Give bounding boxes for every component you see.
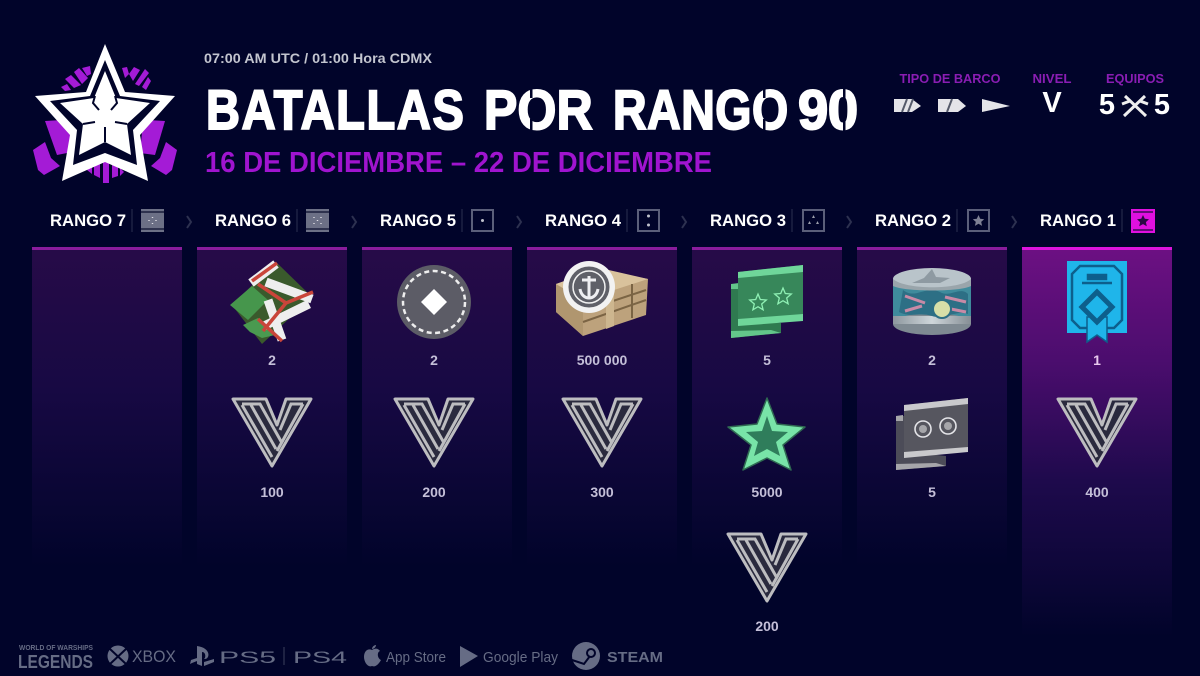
logo: Google Play: Google Play (483, 649, 558, 666)
logo: PS4: PS4 (293, 648, 347, 667)
value: 2 (928, 352, 936, 368)
icon: ornate container (893, 268, 971, 335)
panel: rank 1 (1022, 247, 1172, 637)
rank 4 header: RANGO 4 (545, 212, 622, 230)
rank 1 header: RANGO 1 (1040, 212, 1116, 230)
logo: Steam: STEAM (607, 649, 663, 666)
icon: ship double stripe (894, 99, 921, 112)
value: 1 (1093, 352, 1101, 368)
rank 4 header (545, 209, 659, 232)
teams block: 5 (1154, 89, 1170, 121)
value: 5 (928, 484, 936, 500)
title (206, 78, 858, 142)
logo: PS5 (190, 646, 276, 667)
rank 3 header: RANGO 3 (710, 212, 786, 230)
logo: App Store: App Store (386, 649, 446, 666)
icon: ship plain (982, 99, 1010, 112)
rank 2 header: RANGO 2 (875, 212, 951, 230)
rank 5 header: RANGO 5 (380, 212, 456, 230)
icon: chevron points (1058, 399, 1136, 466)
ship type block (894, 71, 1010, 112)
arrow (847, 216, 851, 228)
rank 6 header: RANGO 6 (215, 212, 291, 230)
rank 3 header (710, 209, 824, 232)
date range: 16 DE DICIEMBRE – 22 DE DICIEMBRE (205, 147, 712, 179)
value: 500 000 (577, 352, 628, 368)
panel: rank 5 (362, 247, 512, 567)
panel: rank 7 (32, 247, 182, 567)
panel: rank 4 (527, 247, 677, 567)
divider (283, 647, 285, 665)
icon: crossed swords (1122, 96, 1148, 116)
logo: App Store (364, 645, 446, 666)
title: RANGO (613, 78, 788, 141)
teams block (1099, 71, 1170, 121)
rank 1 header (1040, 209, 1155, 233)
title: POR (484, 79, 593, 142)
icon: chevron points (728, 534, 806, 601)
schedule text: 07:00 AM UTC / 01:00 Hora CDMX (204, 51, 432, 66)
logo: World of Warships Legends (18, 645, 93, 672)
arrow (352, 216, 356, 228)
tier block: NIVEL (1032, 71, 1072, 86)
emblem: rank star (33, 44, 177, 183)
logo: Google Play (460, 646, 558, 667)
icon: green flags (731, 265, 803, 338)
logo: Xbox (108, 646, 176, 666)
icon: green star (728, 398, 805, 470)
panel: rank 6 (197, 247, 347, 567)
logo: World of Warships Legends: WORLD OF WARSHIPS (19, 645, 93, 652)
value: 2 (268, 352, 276, 368)
ship type block: TIPO DE BARCO (900, 71, 1000, 86)
value: 300 (590, 484, 614, 500)
icon: grey flags (896, 398, 968, 470)
rank 7 header (50, 209, 164, 232)
icon: camouflage (230, 262, 313, 344)
rank 6 header (215, 209, 329, 232)
icon: signal token (397, 265, 471, 339)
rank 5 header (380, 209, 493, 232)
logo: PS5: PS5 (219, 648, 276, 667)
logo: Steam (572, 642, 663, 670)
icon: chevron points (395, 399, 473, 466)
title: BATALLAS (206, 78, 464, 141)
value: 200 (422, 484, 446, 500)
icon: chevron points (233, 399, 311, 466)
icon: ship single stripe (938, 99, 966, 112)
icon: certificate (1067, 261, 1127, 342)
logo: World of Warships Legends: LEGENDS (18, 652, 93, 672)
icon: credits crate (556, 261, 648, 336)
title: 90 (798, 78, 858, 141)
tier block (1032, 71, 1072, 119)
panel: rank 2 (857, 247, 1007, 567)
arrow (1012, 216, 1016, 228)
tier block: V (1042, 87, 1062, 119)
value: 5 (763, 352, 771, 368)
arrow (187, 216, 191, 228)
arrow (682, 216, 686, 228)
value: 5000 (751, 484, 783, 500)
icon: chevron points (563, 399, 641, 466)
value: 2 (430, 352, 438, 368)
rank 7 header: RANGO 7 (50, 212, 126, 230)
teams block: EQUIPOS (1106, 71, 1164, 86)
rank 2 header (875, 209, 989, 232)
value: 200 (755, 618, 779, 634)
value: 400 (1085, 484, 1109, 500)
panel: rank 3 (692, 247, 842, 567)
logo: Xbox: XBOX (132, 647, 176, 666)
value: 100 (260, 484, 284, 500)
arrow (517, 216, 521, 228)
teams block: 5 (1099, 89, 1115, 121)
footer logos (18, 642, 663, 672)
